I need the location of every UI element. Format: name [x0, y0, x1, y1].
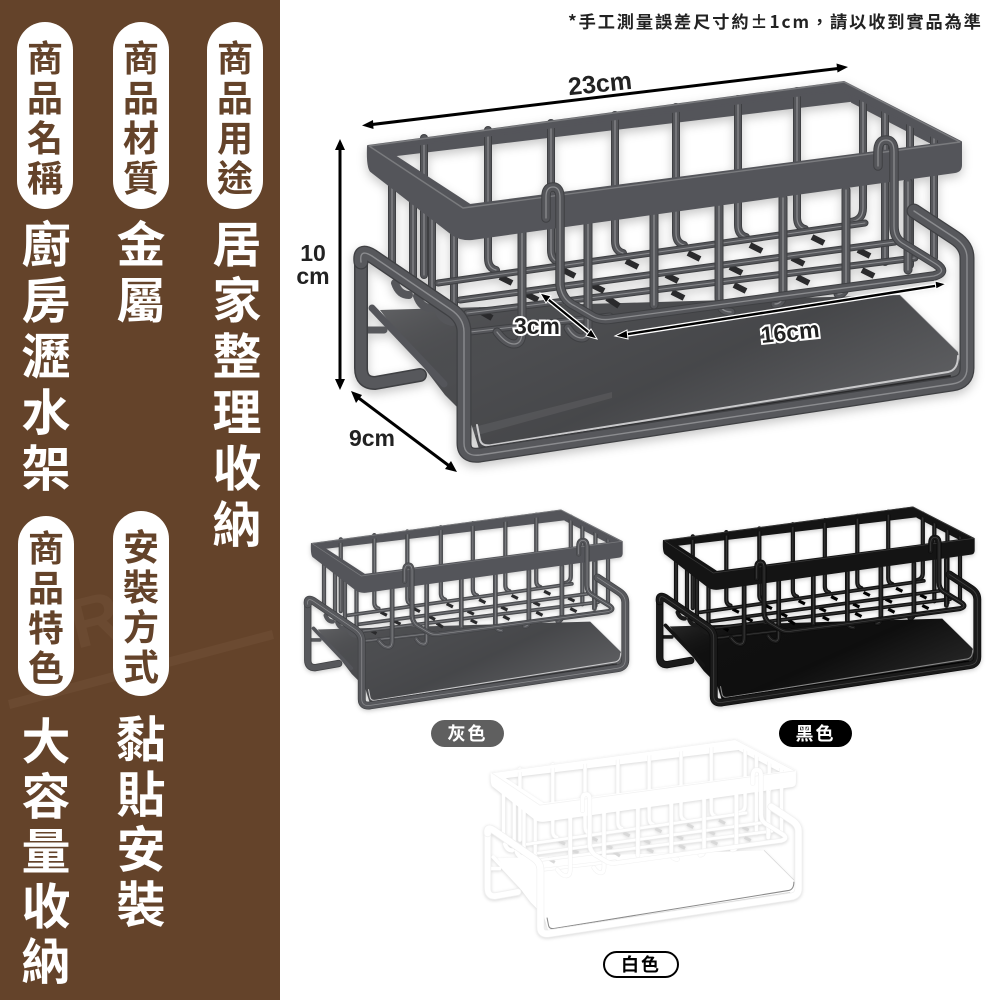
value: usage: [212, 206, 262, 557]
value: features: 收: [21, 868, 70, 939]
dimension: height 10cm: 10: [300, 240, 326, 266]
dimension: width 23cm: 23cm: [567, 67, 633, 101]
colour label: white: 白色: [621, 951, 661, 977]
label pill: usage: 品: [217, 70, 253, 122]
label pill: product name: 稱: [27, 150, 63, 202]
label pill: usage: 用: [217, 110, 253, 162]
rack drawing black: [660, 507, 977, 703]
value: installation: 安: [116, 811, 166, 882]
value: material: [116, 206, 166, 333]
value: usage: 家: [212, 262, 262, 333]
dimension: depth 9cm: 9cm: [349, 425, 395, 451]
value: usage: 納: [212, 486, 262, 557]
black colour variant rack: [660, 507, 977, 703]
faint watermark on tray: [470, 392, 612, 436]
dimension: inner depth 3cm: [514, 293, 597, 339]
label pill: material: 材: [123, 110, 159, 162]
label pill: installation: 方: [123, 599, 159, 651]
dimension: depth 9cm: [349, 391, 457, 472]
rack drawing: [361, 82, 967, 455]
dimension: width 23cm: [362, 64, 848, 129]
colour label: gray: [431, 720, 504, 747]
label pill: installation: 式: [123, 639, 159, 691]
value: usage: 理: [212, 374, 262, 445]
value: features: [21, 703, 70, 994]
dimension: inner width 16cm: 16cm: [759, 316, 821, 348]
label pill: installation: 安: [123, 519, 159, 571]
value: product name: 水: [21, 374, 70, 445]
colour label: white: [603, 951, 679, 978]
value: product name: 廚: [21, 206, 70, 277]
value: usage: 收: [212, 430, 262, 501]
label pill: installation: [113, 511, 169, 696]
main gray rack illustration: [361, 82, 967, 455]
value: product name: 房: [21, 262, 70, 333]
dimension: height 10cm: cm: [296, 263, 330, 289]
rack drawing white: [487, 740, 798, 934]
value: installation: 裝: [116, 866, 166, 937]
value: usage: 整: [212, 318, 262, 389]
colour label: black: 黑色: [796, 720, 836, 746]
rack drawing gray: [308, 510, 625, 706]
label pill: product name: [17, 22, 73, 209]
value: installation: 黏: [116, 701, 166, 772]
label pill: usage: 商: [217, 30, 253, 82]
label pill: features: [18, 516, 74, 696]
value: installation: [116, 701, 166, 937]
watermark on brown panel: [0, 0, 280, 1000]
value: features: 量: [21, 813, 70, 884]
white colour variant rack: [487, 740, 798, 934]
value: material: 金: [116, 206, 166, 277]
label pill: material: [113, 22, 169, 209]
colour label: black: [779, 720, 852, 747]
colour label: gray: 灰色: [448, 720, 488, 746]
value: product name: 架: [21, 430, 70, 501]
panel: product specification sidebar: [0, 0, 280, 1000]
label pill: material: 商: [123, 30, 159, 82]
label pill: features: 商: [28, 520, 64, 572]
gray colour variant rack: [308, 510, 625, 706]
label pill: material: 質: [123, 150, 159, 202]
value: product name: 瀝: [21, 318, 70, 389]
measurement disclaimer note: *手工測量誤差尺寸約±1cm，請以收到實品為準: [568, 8, 983, 33]
label pill: product name: 商: [27, 30, 63, 82]
value: installation: 貼: [116, 756, 166, 827]
label pill: installation: 裝: [123, 559, 159, 611]
label pill: features: 色: [28, 640, 64, 692]
watermark on brown panel: ARZ: [12, 565, 171, 676]
label pill: product name: 名: [27, 110, 63, 162]
label pill: product name: 品: [27, 70, 63, 122]
dimension: height 10cm: [294, 139, 345, 390]
value: product name: [21, 206, 70, 501]
label pill: usage: 途: [217, 150, 253, 202]
label pill: material: 品: [123, 70, 159, 122]
dimension: inner width 16cm: [615, 281, 946, 348]
label pill: features: 品: [28, 560, 64, 612]
value: usage: 居: [212, 206, 262, 277]
dimension: inner depth 3cm: 3cm: [514, 313, 560, 339]
label pill: features: 特: [28, 600, 64, 652]
value: features: 納: [21, 923, 70, 994]
value: material: 屬: [116, 262, 166, 333]
value: features: 容: [21, 758, 70, 829]
label pill: usage: [207, 22, 263, 209]
value: features: 大: [21, 703, 70, 774]
